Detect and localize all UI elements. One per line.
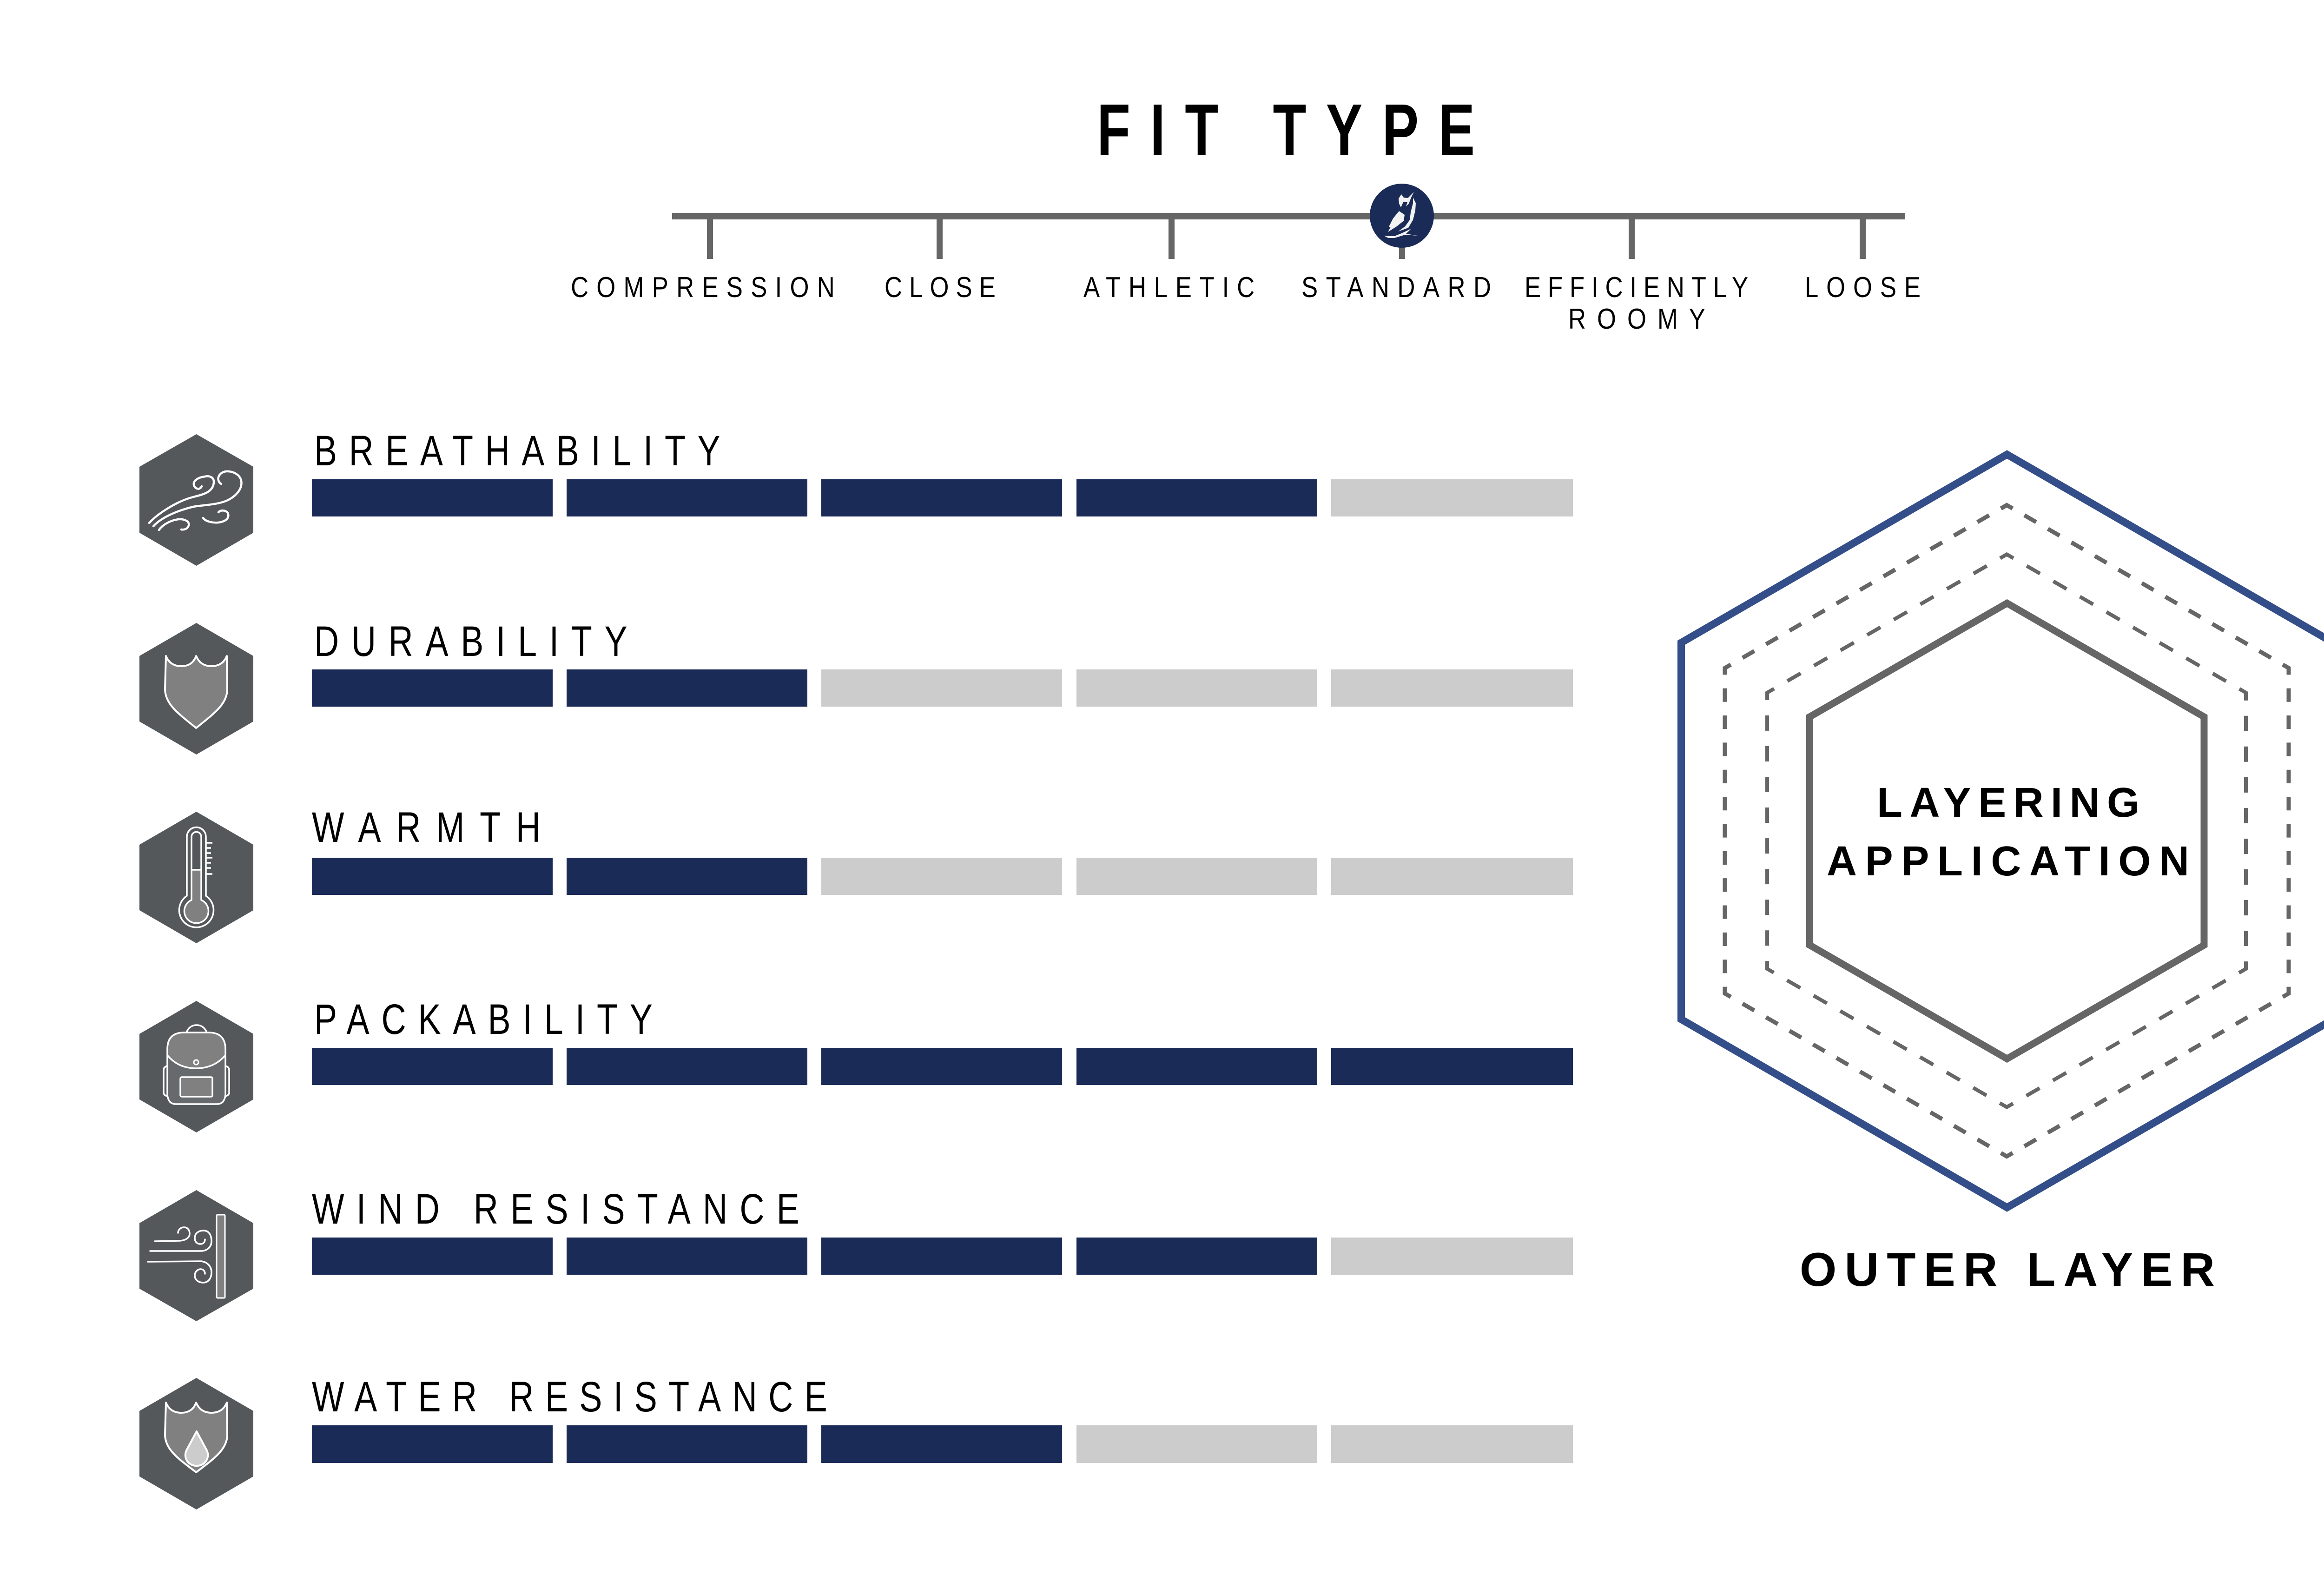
- bar: rating 4 of 5: [312, 1238, 1573, 1275]
- label: warmth: WARMTH: [312, 803, 541, 851]
- label: compression: COMPRESSION: [571, 271, 835, 304]
- label: standard: STANDARD: [1301, 271, 1491, 304]
- row: packability: [139, 995, 1573, 1132]
- icon: thermometer: [139, 812, 253, 943]
- row: wind resistance: [139, 1185, 1573, 1321]
- bar: rating 4 of 5: [312, 479, 1573, 516]
- label: breathability: BREATHABILITY: [314, 427, 720, 475]
- label: efficiently roomy: ROOMY: [1568, 303, 1705, 335]
- dashed layer hexagon 2: [1767, 554, 2246, 1107]
- bar: rating 2 of 5: [312, 669, 1573, 707]
- icon: shield: [139, 623, 253, 755]
- icon: backpack: [139, 1001, 253, 1132]
- icon: wind against wall: [139, 1190, 253, 1321]
- row: water resistance: [139, 1373, 1573, 1509]
- icon: shield with water drop: [139, 1378, 253, 1509]
- text: layering application: LAYERING: [1877, 780, 2139, 826]
- label: water resistance: WATER RESISTANCE: [312, 1373, 827, 1421]
- panel: layering hexagons: [1681, 455, 2324, 1296]
- label: close: CLOSE: [885, 271, 996, 304]
- bar: rating 3 of 5: [312, 1425, 1573, 1463]
- text: layering application: APPLICATION: [1827, 838, 2189, 885]
- text: layering application: [1827, 780, 2189, 885]
- icon: wind swirls: [139, 434, 253, 566]
- fit type scale: [672, 184, 1905, 259]
- dashed layer hexagon 1: [1725, 505, 2289, 1157]
- title: fit type: FIT TYPE: [1097, 89, 1475, 171]
- row: durability: [139, 617, 1573, 755]
- outer layer hexagon: [1681, 455, 2324, 1208]
- bar: rating 2 of 5: [312, 858, 1573, 895]
- inner layer hexagon: [1810, 603, 2204, 1059]
- text: outer layer: OUTER LAYER: [1800, 1243, 2215, 1296]
- label: wind resistance: WIND RESISTANCE: [312, 1185, 799, 1233]
- row: warmth: [139, 803, 1573, 943]
- bar: rating 5 of 5: [312, 1048, 1573, 1085]
- label: durability: DURABILITY: [314, 617, 627, 665]
- label: loose: LOOSE: [1805, 271, 1921, 304]
- label: packability: PACKABILITY: [314, 995, 653, 1043]
- label: efficiently roomy: EFFICIENTLY: [1525, 271, 1748, 304]
- label: efficiently roomy: [1525, 271, 1748, 335]
- label: athletic: ATHLETIC: [1083, 271, 1254, 304]
- row: breathability: [139, 427, 1573, 566]
- icon: owl marker on standard: [1370, 184, 1434, 248]
